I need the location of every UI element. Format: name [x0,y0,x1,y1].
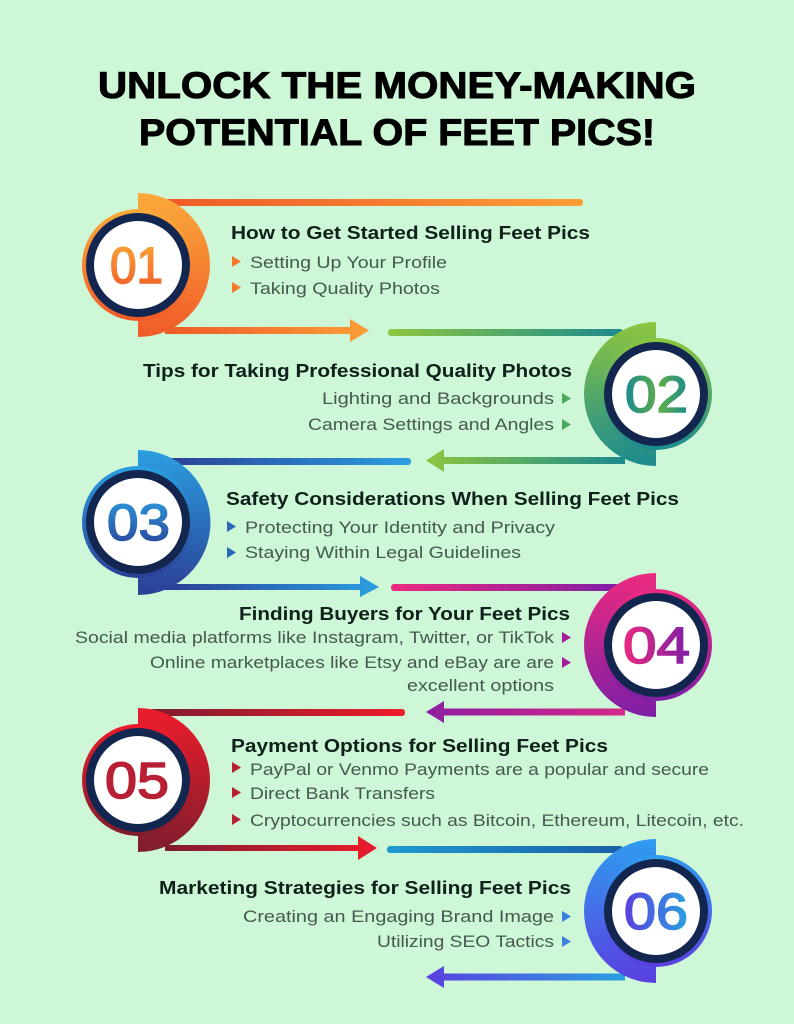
heading 01: How to Get Started Selling Feet Pics [231,222,590,243]
panel: step 05 [82,708,744,860]
crescent 01 [138,193,210,337]
list 05: Direct Bank Transfers [250,784,435,803]
list 01: Taking Quality Photos [250,279,440,298]
list 02: Lighting and Backgrounds [322,389,554,408]
title: POTENTIAL OF FEET PICS! [139,112,655,153]
list 05: PayPal or Venmo Payments are a popular and secure [250,760,709,779]
heading 05: Payment Options for Selling Feet Pics [231,735,608,756]
list 01: Setting Up Your Profile [250,253,447,272]
top bar 06 [387,846,623,853]
number badge 04 [600,589,712,701]
arrow 04 [426,701,625,723]
arrow 06 [426,966,625,988]
number badge 02 [600,338,712,450]
number badge 01: 01 [110,237,163,294]
top bar 01 [165,199,583,206]
crescent 03 [138,450,210,595]
number badge 03 [82,466,194,578]
list 04: excellent options [407,676,554,695]
arrow 02 [426,449,625,472]
panel: step 03 [82,450,679,597]
list 03: Protecting Your Identity and Privacy [245,518,556,537]
panel: step 04 [75,573,712,723]
list 06 [243,907,571,951]
heading 03: Safety Considerations When Selling Feet Pics [226,488,679,509]
list 04: Social media platforms like Instagram, Twitter, or TikTok [75,628,555,647]
arrow 01 [165,319,369,342]
list 06: Utilizing SEO Tactics [377,932,554,951]
number badge 06 [600,855,712,967]
top bar 05 [150,709,405,716]
top bar 04 [391,584,623,591]
crescent 05 [138,708,210,852]
list 03 [227,518,556,562]
list 04 [75,628,571,695]
number badge 03: 03 [107,494,170,551]
arrow 05 [165,836,377,860]
panel: step 02 [143,322,712,472]
list 05 [232,760,744,830]
list 02 [308,389,571,434]
list 01 [232,253,447,298]
heading 06: Marketing Strategies for Selling Feet Pics [159,877,571,898]
number badge 05: 05 [105,752,169,809]
list 04: Online marketplaces like Etsy and eBay are are [150,653,554,672]
arrow 03 [165,576,379,597]
number badge 04: 04 [623,617,690,674]
number badge 01 [82,209,194,321]
list 03: Staying Within Legal Guidelines [245,543,521,562]
list 02: Camera Settings and Angles [308,415,554,434]
number badge 05 [82,724,194,836]
title: UNLOCK THE MONEY-MAKING [98,65,696,106]
number badge 06: 06 [624,883,688,940]
top bar 03 [165,458,411,465]
heading 04: Finding Buyers for Your Feet Pics [239,603,570,624]
crescent 02 [584,322,656,466]
list 05: Cryptocurrencies such as Bitcoin, Ethereum, Litecoin, etc. [250,811,744,830]
number badge 02: 02 [625,366,688,423]
crescent 06 [584,839,656,983]
heading 02: Tips for Taking Professional Quality Photos [143,360,572,381]
title [98,65,696,153]
list 06: Creating an Engaging Brand Image [243,907,554,926]
panel: step 06 [159,839,712,988]
panel: step 01 [82,193,590,342]
top bar 02 [388,329,623,336]
crescent 04 [584,573,656,717]
